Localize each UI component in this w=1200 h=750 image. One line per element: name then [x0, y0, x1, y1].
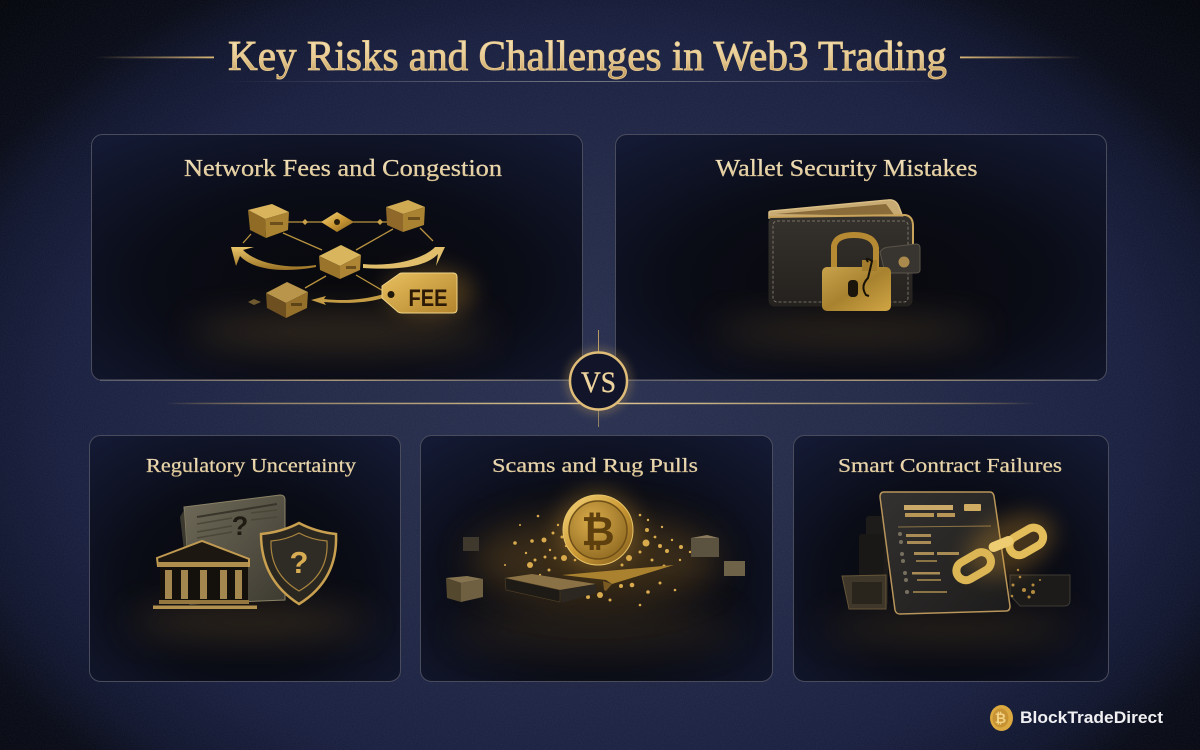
- cube: centre: [319, 245, 361, 279]
- arrow: right curved: [363, 247, 445, 269]
- gold fragments: [1011, 569, 1041, 598]
- cube: top right: [386, 200, 425, 232]
- contract document: [880, 492, 1010, 614]
- wallet strap: [880, 244, 920, 273]
- arrow: left curved: [231, 247, 316, 270]
- icon: bitcoin coin: ₿: [995, 710, 1006, 726]
- panel: network fees and congestion: [92, 134, 582, 381]
- icon: bitcoin coin: [990, 705, 1013, 731]
- icon: blockchain network with fee tag: [231, 200, 475, 318]
- gold particles: [504, 514, 701, 606]
- coin: [556, 488, 640, 572]
- arrow: tag to block: [311, 292, 392, 305]
- logo: BlockTradeDirect: [990, 705, 1163, 731]
- vs badge: [564, 347, 632, 415]
- heading: smart contract failures: Smart Contract Failures: [838, 455, 1062, 477]
- coin: ₿: [581, 508, 615, 554]
- fee tag: [382, 273, 457, 313]
- document with question mark: [180, 495, 285, 604]
- icon: contract with broken chain: [842, 492, 1070, 614]
- panel: wallet security mistakes: [616, 134, 1106, 381]
- panel: smart contract failures: [794, 436, 1108, 682]
- floating cubes: [446, 535, 745, 602]
- panel: regulatory uncertainty: [90, 436, 400, 682]
- document with question mark: ?: [232, 511, 248, 541]
- heading: network fees and congestion: Network Fees and Congestion: [184, 156, 502, 182]
- shield with question mark: [261, 523, 336, 604]
- broken chain links: [953, 499, 1065, 591]
- heading: wallet security mistakes: Wallet Security Mistakes: [716, 156, 978, 182]
- brand name: BlockTradeDirect: [1020, 708, 1163, 727]
- vs badge: VS: [581, 366, 616, 399]
- heading: scams and rug pulls: Scams and Rug Pulls: [492, 455, 698, 477]
- padlock: [822, 235, 891, 311]
- panel: scams and rug pulls: [420, 436, 772, 682]
- icon: document, temple and shield: [153, 495, 336, 609]
- icon: wallet with padlock: [768, 200, 920, 311]
- cube: top left: [248, 204, 289, 238]
- divider lines: [165, 330, 1035, 427]
- background documents: [842, 516, 1070, 609]
- broken gold bars: [505, 565, 674, 603]
- cube: lower left: [266, 282, 308, 318]
- heading: regulatory uncertainty: Regulatory Uncertainty: [146, 455, 356, 477]
- shield with question mark: ?: [290, 545, 308, 580]
- title: Key Risks and Challenges in Web3 Trading: [228, 34, 947, 80]
- temple: [153, 541, 257, 609]
- icon: bitcoin coin and scattering gold: [446, 488, 745, 606]
- fee tag: FEE: [408, 285, 448, 312]
